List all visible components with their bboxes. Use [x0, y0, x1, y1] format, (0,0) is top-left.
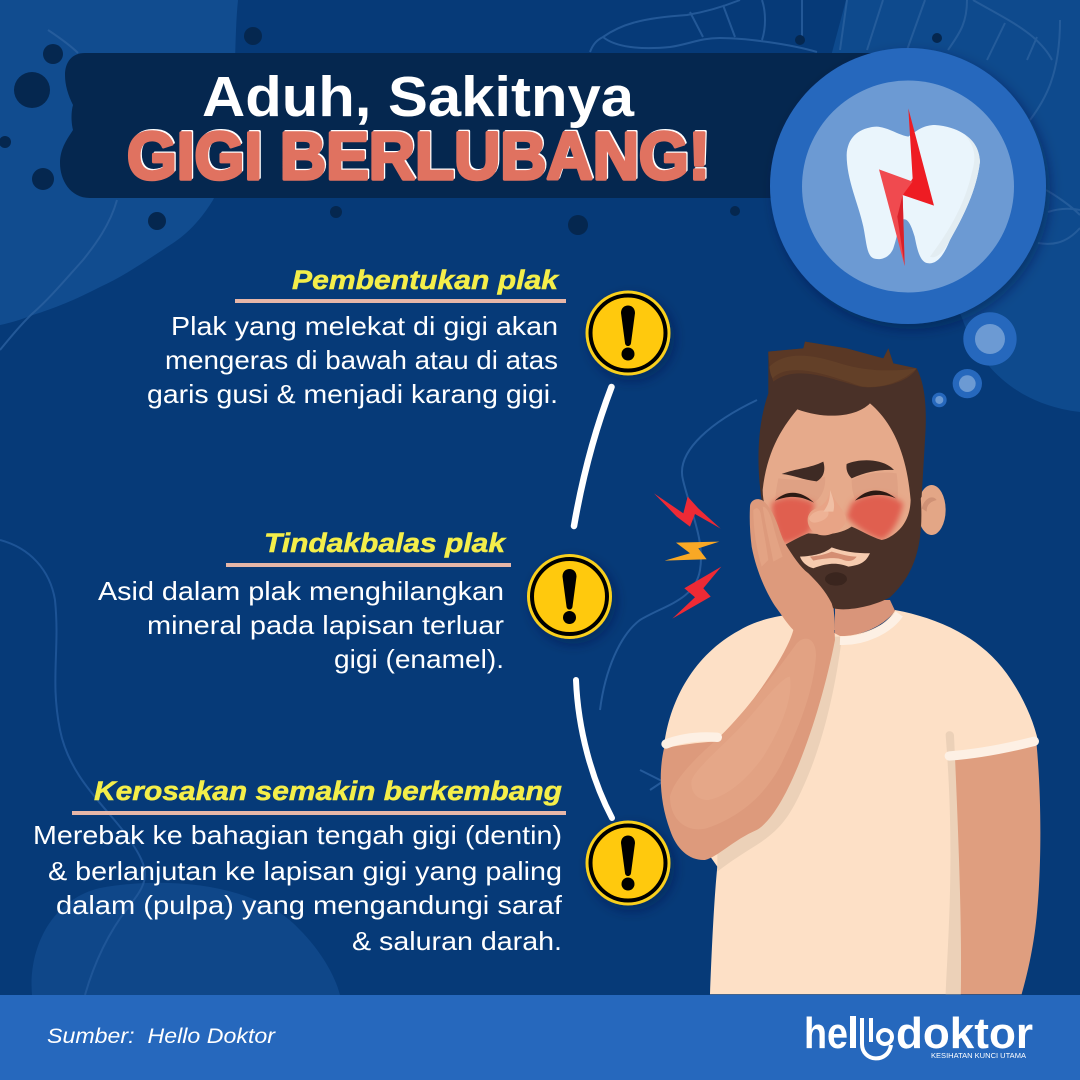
forearm highlight — [670, 639, 816, 829]
man illustration: body — [661, 600, 1040, 994]
cheeks — [772, 495, 903, 543]
collar — [840, 614, 899, 641]
text block: pembentukan plak: Plak yang melekat di gigi akan — [171, 311, 558, 341]
thought circle with tooth — [770, 48, 1046, 324]
shirt side shadow — [946, 731, 961, 994]
forearm inner highlight — [691, 677, 790, 800]
neck — [835, 600, 895, 636]
eyebrows — [782, 460, 894, 481]
beard — [785, 497, 921, 609]
face — [763, 403, 911, 547]
icon: warning one — [586, 290, 670, 376]
man illustration: head — [750, 342, 946, 630]
source credit: Sumber: Hello Doktor — [47, 1025, 276, 1048]
footer bar — [0, 995, 1080, 1080]
chin patch — [825, 572, 847, 586]
icon: warning three — [586, 820, 670, 906]
thought bubbles — [932, 312, 1017, 407]
logo: hellodoktor: doktor — [896, 1009, 1033, 1058]
connector line two — [576, 680, 612, 818]
title banner — [60, 53, 880, 198]
forearm — [661, 600, 835, 860]
decorative dots — [0, 27, 942, 235]
logo: hellodoktor: KESIHATAN KUNCI UTAMA — [931, 1053, 1026, 1060]
text block: tindakbalas plak: Asid dalam plak menghilangkan — [98, 576, 504, 606]
heading: pembentukan plak: Pembentukan plak — [292, 265, 560, 295]
mouth — [800, 547, 870, 568]
text block: kerosakan semakin berkembang: Merebak ke bahagian tengah gigi (dentin) — [33, 820, 562, 850]
mouth inner — [810, 552, 857, 561]
text block: pembentukan plak — [147, 311, 558, 409]
nose tip highlight — [809, 510, 829, 523]
eye shading — [775, 472, 898, 507]
title line two: GIGI BERLUBANG! — [127, 119, 710, 194]
text block: kerosakan semakin berkembang: & berlanjutan ke lapisan gigi yang paling — [48, 856, 562, 886]
text block: pembentukan plak: garis gusi & menjadi karang gigi. — [147, 379, 558, 409]
hair back — [758, 342, 926, 573]
text block: tindakbalas plak: gigi (enamel). — [334, 644, 504, 674]
title line two: GIGI BERLUBANG! — [128, 118, 712, 192]
eyes closed — [775, 491, 896, 503]
nose bridge highlight — [823, 490, 834, 512]
bolt orange — [665, 542, 719, 561]
icon: tooth with lightning — [847, 108, 980, 266]
ear — [918, 485, 946, 535]
bolt red bottom — [672, 567, 721, 619]
text block: tindakbalas plak: mineral pada lapisan terluar — [147, 610, 504, 640]
text block: tindakbalas plak — [98, 576, 504, 674]
heading: kerosakan semakin berkembang: Kerosakan semakin berkembang — [94, 776, 563, 806]
text block: pembentukan plak: mengeras di bawah atau di atas — [165, 345, 558, 375]
text block: kerosakan semakin berkembang — [33, 820, 563, 956]
shirt — [664, 610, 1038, 994]
heading: tindakbalas plak: Tindakbalas plak — [264, 528, 507, 558]
text block: kerosakan semakin berkembang: dalam (pulpa) yang mengandungi saraf — [56, 890, 563, 920]
fingers — [753, 507, 783, 567]
icon: warning two — [527, 554, 612, 639]
hair crown — [768, 342, 917, 387]
right arm — [952, 745, 1040, 994]
hand — [750, 499, 835, 630]
shirt shadow under arm — [717, 637, 842, 872]
title line one: Aduh, Sakitnya — [202, 65, 635, 129]
hair highlight — [769, 356, 917, 387]
sleeve cuff left — [666, 737, 717, 744]
nose — [808, 490, 846, 535]
logo: hellodoktor: he — [804, 1009, 848, 1058]
text block: kerosakan semakin berkembang: & saluran darah. — [352, 926, 562, 956]
pain bolts — [654, 493, 721, 619]
bolt red top — [654, 493, 721, 529]
logo: hellodoktor — [804, 1009, 1033, 1060]
sleeve cuff right — [949, 741, 1034, 756]
connector line one — [574, 387, 612, 526]
